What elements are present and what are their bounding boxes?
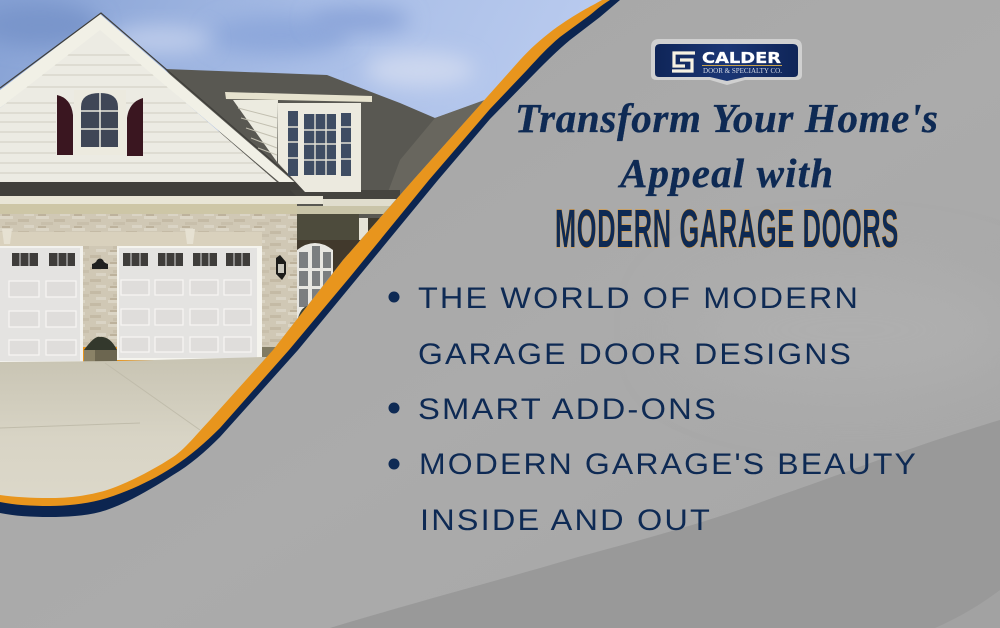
logo tagline: DOOR & SPECIALTY CO. [703, 66, 782, 75]
sky with clouds [0, 0, 620, 300]
curved navy band [0, 0, 620, 517]
gable window and shutters [57, 90, 143, 156]
title line 2: Appeal with [617, 150, 833, 196]
brick wall [0, 214, 297, 347]
house number plaque [92, 258, 108, 269]
title line 1: Transform Your Home's [515, 95, 938, 141]
wall lantern [276, 255, 286, 280]
brick keystones [2, 229, 195, 244]
photo: house with garage doors [0, 0, 620, 520]
dormer [225, 92, 372, 192]
concrete driveway [0, 357, 267, 498]
gable wall siding [0, 28, 300, 183]
upper roof [165, 69, 482, 240]
bullet: designs: GARAGE DOOR DESIGNS [418, 338, 853, 371]
logo: Calder Door & Specialty Co. [651, 39, 802, 85]
bullet: beauty [388, 448, 918, 537]
bullet: smart add-ons: SMART ADD-ONS [418, 393, 718, 426]
planter [84, 337, 117, 362]
gable fascia [0, 14, 307, 193]
logo mark [672, 53, 695, 71]
right roof slope [389, 100, 484, 204]
bullet: designs [388, 282, 860, 371]
bullet: designs: THE WORLD OF MODERN [418, 282, 860, 315]
gutter and soffit [0, 196, 398, 254]
right garage door [117, 246, 262, 360]
entry window [297, 240, 360, 319]
bullet list [388, 282, 918, 537]
title [515, 95, 938, 196]
bullet: beauty: INSIDE AND OUT [420, 504, 712, 537]
bullet: beauty: MODERN GARAGE'S BEAUTY [419, 448, 918, 481]
curved orange band [0, 0, 610, 506]
lower roof band [0, 182, 303, 196]
left garage door [0, 246, 83, 362]
logo wordmark: CALDER [702, 49, 782, 67]
